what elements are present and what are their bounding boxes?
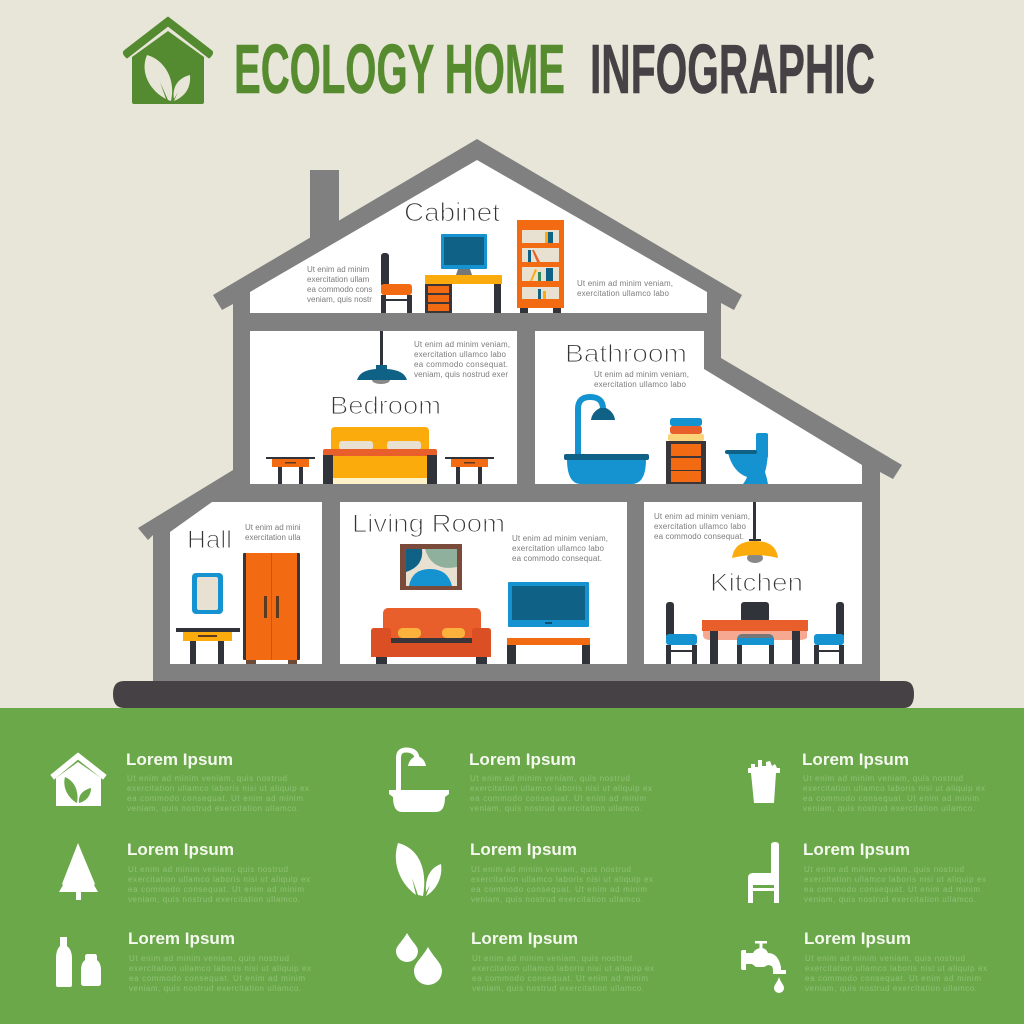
caption left bbox=[307, 265, 372, 304]
icon: fries cup bbox=[748, 760, 780, 803]
caption: Ut enim ad minim veniam, bbox=[512, 534, 608, 543]
mirror bbox=[192, 573, 223, 614]
room: living room bbox=[340, 502, 627, 664]
body text: exercitation ullamco laboris nisi ut aliquip ex bbox=[470, 784, 652, 793]
body text bbox=[803, 774, 985, 813]
body text: exercitation ullamco laboris nisi ut aliquip ex bbox=[803, 784, 985, 793]
body text: veniam, quis nostrud exercitation ullamco. bbox=[805, 984, 977, 993]
body text: ea commodo consequat. Ut enim ad minim bbox=[805, 974, 981, 983]
title: ECOLOGY HOME bbox=[234, 30, 565, 108]
house cross-section bbox=[113, 139, 914, 708]
logo: eco house bbox=[123, 17, 213, 104]
nightstand right bbox=[445, 457, 494, 484]
room: bathroom bbox=[535, 331, 862, 484]
framed picture bbox=[400, 544, 462, 590]
body text bbox=[804, 865, 986, 904]
dining table bbox=[702, 620, 808, 664]
body text: exercitation ullamco laboris nisi ut aliquip ex bbox=[472, 964, 654, 973]
body text: veniam, quis nostrud exercitation ullamco. bbox=[471, 895, 643, 904]
caption bbox=[414, 340, 510, 379]
caption: exercitation ullamco labo bbox=[414, 350, 507, 359]
television bbox=[508, 582, 589, 627]
icon: bottles bbox=[56, 937, 101, 987]
caption bbox=[245, 523, 301, 542]
icon: water tap bbox=[741, 941, 786, 993]
caption left: veniam, quis nostr bbox=[307, 295, 372, 304]
legend item 9: tap bbox=[741, 929, 987, 993]
caption: exercitation ulla bbox=[245, 533, 301, 542]
icon: chair bbox=[748, 842, 779, 903]
room label: Bathroom: Bathroom bbox=[565, 340, 687, 368]
caption: exercitation ullamco labo bbox=[594, 380, 687, 389]
caption bbox=[654, 512, 750, 541]
heading: Lorem Ipsum bbox=[469, 750, 576, 769]
heading: Lorem Ipsum bbox=[126, 750, 233, 769]
body text: Ut enim ad minim veniam, quis nostrud bbox=[128, 865, 288, 874]
body text: veniam, quis nostrud exercitation ullamco. bbox=[472, 984, 644, 993]
caption bbox=[594, 370, 689, 389]
body text: Ut enim ad minim veniam, quis nostrud bbox=[470, 774, 630, 783]
icon: tree bbox=[59, 843, 98, 900]
icon: eco house bbox=[51, 753, 106, 806]
caption: ea commodo consequat. bbox=[414, 360, 508, 369]
heading: Lorem Ipsum bbox=[804, 929, 911, 948]
heading: Lorem Ipsum bbox=[471, 929, 578, 948]
body text bbox=[471, 865, 653, 904]
room label: Hall: Hall bbox=[187, 526, 232, 554]
body text bbox=[129, 954, 311, 993]
towels on cabinet bbox=[666, 418, 706, 484]
caption: exercitation ullamco labo bbox=[512, 544, 605, 553]
console table bbox=[176, 628, 240, 664]
room label: Kitchen: Kitchen bbox=[710, 569, 803, 597]
caption: exercitation ullamco labo bbox=[654, 522, 747, 531]
desk bbox=[425, 275, 502, 313]
nightstand left bbox=[266, 457, 315, 484]
legend item 8: chair bbox=[748, 840, 986, 904]
caption right: exercitation ullamco labo bbox=[577, 289, 670, 298]
body text: Ut enim ad minim veniam, quis nostrud bbox=[803, 774, 963, 783]
body text: veniam, quis nostrud exercitation ullamco. bbox=[129, 984, 301, 993]
caption left: Ut enim ad minim bbox=[307, 265, 370, 274]
room label: Living Room: Living Room bbox=[352, 510, 505, 538]
legend item 4: shower bbox=[389, 750, 652, 813]
body text bbox=[805, 954, 987, 993]
room: hall bbox=[170, 502, 322, 664]
icon: leaves bbox=[396, 843, 441, 896]
caption: Ut enim ad minim veniam, bbox=[654, 512, 750, 521]
body text: ea commodo consequat. Ut enim ad minim bbox=[472, 974, 648, 983]
caption: Ut enim ad minim veniam, bbox=[594, 370, 689, 379]
bed bbox=[323, 427, 437, 484]
room: cabinet bbox=[250, 160, 707, 313]
caption: Ut enim ad minim veniam, bbox=[414, 340, 510, 349]
tv stand bbox=[507, 638, 590, 664]
body text: Ut enim ad minim veniam, quis nostrud bbox=[805, 954, 965, 963]
body text: Ut enim ad minim veniam, quis nostrud bbox=[127, 774, 287, 783]
body text bbox=[472, 954, 654, 993]
legend item 6: water drops bbox=[396, 929, 654, 993]
heading: Lorem Ipsum bbox=[470, 840, 577, 859]
body text: veniam, quis nostrud exercitation ullamco. bbox=[804, 895, 976, 904]
chair right bbox=[814, 602, 844, 664]
body text: exercitation ullamco laboris nisi ut aliquip ex bbox=[128, 875, 310, 884]
monitor bbox=[441, 234, 487, 275]
body text: veniam, quis nostrud exercitation ullamco. bbox=[127, 804, 299, 813]
icon: water drops bbox=[396, 933, 442, 985]
body text: ea commodo consequat. Ut enim ad minim bbox=[127, 794, 303, 803]
body text: exercitation ullamco laboris nisi ut aliquip ex bbox=[805, 964, 987, 973]
body text: ea commodo consequat. Ut enim ad minim bbox=[129, 974, 305, 983]
caption: veniam, quis nostrud exer bbox=[414, 370, 508, 379]
room label: Cabinet: Cabinet bbox=[404, 197, 501, 227]
body text: ea commodo consequat. Ut enim ad minim bbox=[803, 794, 979, 803]
room: bedroom bbox=[250, 331, 517, 484]
caption left: ea commodo cons bbox=[307, 285, 372, 294]
body text: veniam, quis nostrud exercitation ullamco. bbox=[803, 804, 975, 813]
legend item 1: eco home bbox=[51, 750, 309, 813]
caption right bbox=[577, 279, 673, 298]
chair centre seat bbox=[737, 634, 774, 664]
caption bbox=[512, 534, 608, 563]
chair bbox=[381, 253, 412, 313]
ceiling lamp bbox=[357, 331, 407, 384]
legend item 5: leaves bbox=[396, 840, 653, 904]
heading: Lorem Ipsum bbox=[803, 840, 910, 859]
body text bbox=[470, 774, 652, 813]
ceiling lamp bbox=[732, 502, 778, 563]
body text: veniam, quis nostrud exercitation ullamco. bbox=[128, 895, 300, 904]
room: kitchen bbox=[644, 502, 862, 664]
body text: Ut enim ad minim veniam, quis nostrud bbox=[129, 954, 289, 963]
body text bbox=[127, 774, 309, 813]
body text: exercitation ullamco laboris nisi ut aliquip ex bbox=[127, 784, 309, 793]
caption: Ut enim ad mini bbox=[245, 523, 301, 532]
body text: ea commodo consequat. Ut enim ad minim bbox=[471, 885, 647, 894]
heading: Lorem Ipsum bbox=[128, 929, 235, 948]
caption: ea commodo consequat. bbox=[654, 532, 744, 541]
body text: ea commodo consequat. Ut enim ad minim bbox=[470, 794, 646, 803]
body text: Ut enim ad minim veniam, quis nostrud bbox=[472, 954, 632, 963]
body text: ea commodo consequat. Ut enim ad minim bbox=[128, 885, 304, 894]
body text: exercitation ullamco laboris nisi ut aliquip ex bbox=[129, 964, 311, 973]
legend item 7: fries cup bbox=[748, 750, 985, 813]
heading: Lorem Ipsum bbox=[802, 750, 909, 769]
heading: Lorem Ipsum bbox=[127, 840, 234, 859]
room label: Bedroom: Bedroom bbox=[330, 392, 441, 420]
foundation bbox=[113, 681, 914, 708]
chair centre back bbox=[741, 602, 769, 622]
body text: exercitation ullamco laboris nisi ut aliquip ex bbox=[804, 875, 986, 884]
house shell bbox=[138, 139, 902, 682]
bookcase bbox=[517, 220, 564, 313]
body text: ea commodo consequat. Ut enim ad minim bbox=[804, 885, 980, 894]
chair left bbox=[666, 602, 697, 664]
legend item 2: tree bbox=[59, 840, 310, 904]
chimney bbox=[310, 170, 339, 240]
body text bbox=[128, 865, 310, 904]
toilet bbox=[725, 433, 768, 484]
body text: exercitation ullamco laboris nisi ut aliquip ex bbox=[471, 875, 653, 884]
caption right: Ut enim ad minim veniam, bbox=[577, 279, 673, 288]
caption left: exercitation ullam bbox=[307, 275, 370, 284]
body text: Ut enim ad minim veniam, quis nostrud bbox=[471, 865, 631, 874]
bathtub with shower bbox=[564, 397, 649, 484]
body text: veniam, quis nostrud exercitation ullamco. bbox=[470, 804, 642, 813]
wardrobe bbox=[243, 553, 300, 664]
body text: Ut enim ad minim veniam, quis nostrud bbox=[804, 865, 964, 874]
legend item 3: bottles bbox=[56, 929, 311, 993]
caption: ea commodo consequat. bbox=[512, 554, 602, 563]
sofa bbox=[371, 608, 491, 664]
icon: bath and shower bbox=[389, 750, 449, 812]
